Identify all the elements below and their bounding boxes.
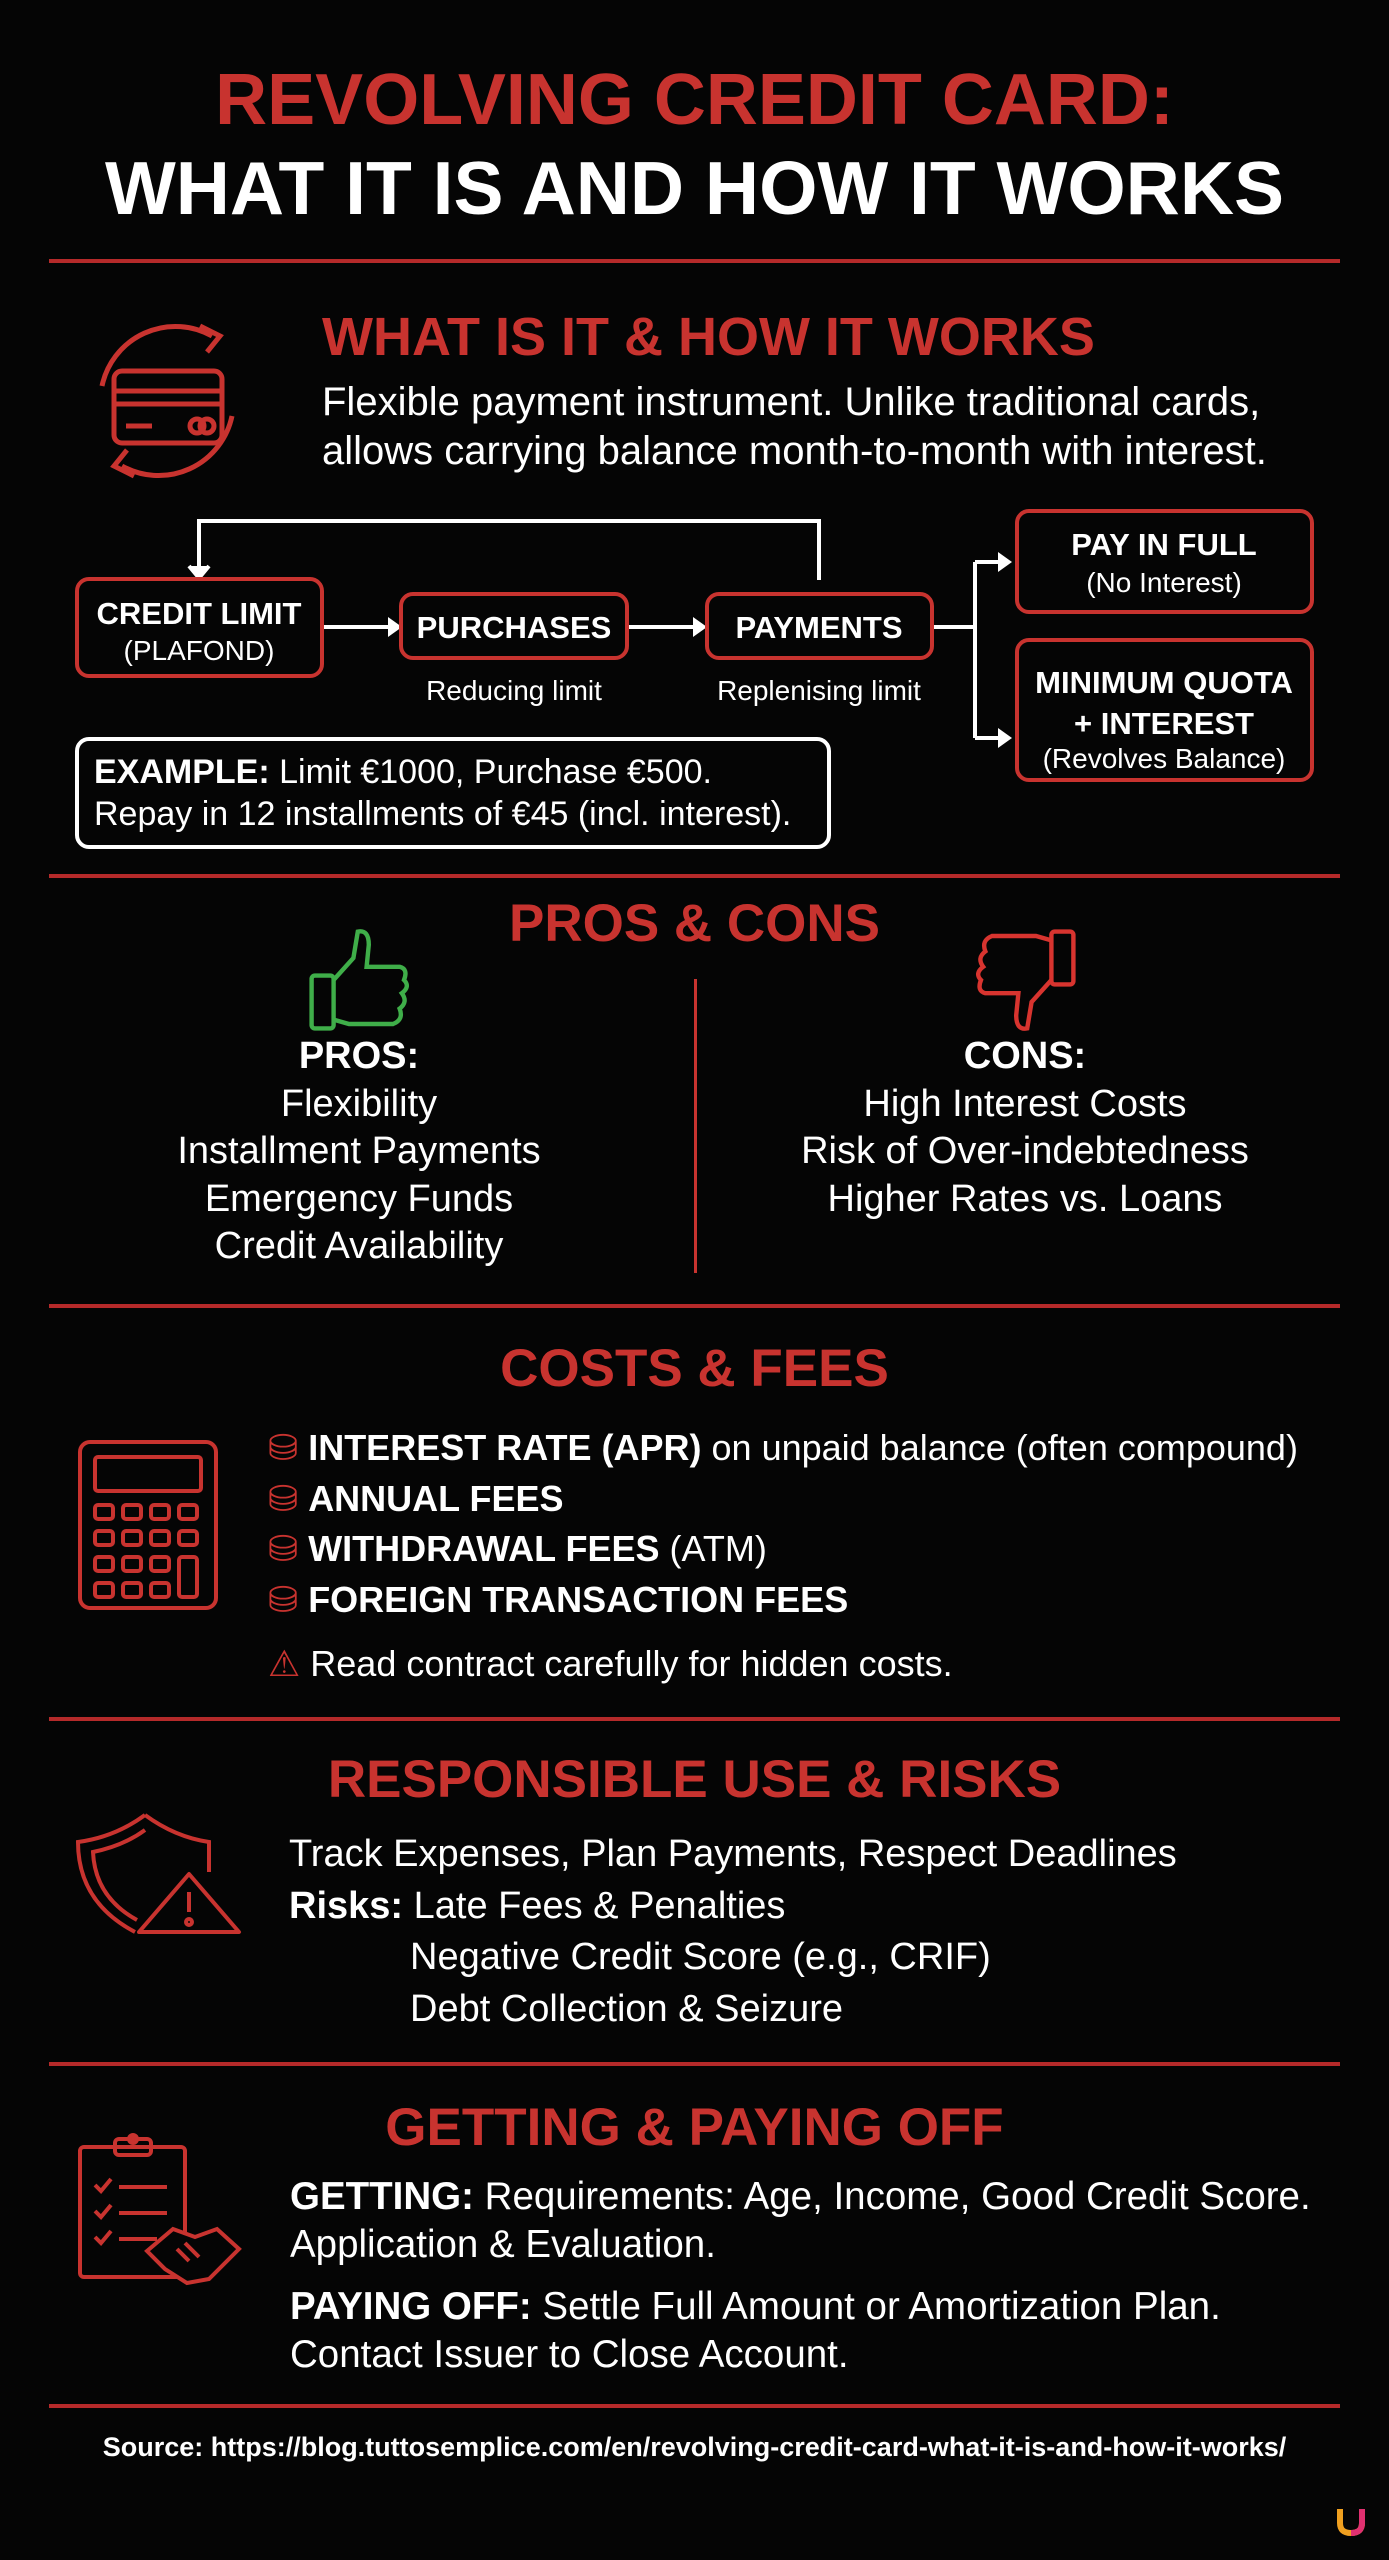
text: responsible use & risks: Negative Credit Score (e.g., CRIF): [410, 1936, 991, 1978]
panel: pros: Emergency Funds: [205, 1178, 513, 1220]
panel: cons: Higher Rates vs. Loans: [828, 1178, 1222, 1220]
list: fees: ⚠ Read contract carefully for hidden costs.: [268, 1643, 953, 1684]
flow diagram: CREDIT LIMIT: [97, 596, 302, 631]
text: getting & paying off: Contact Issuer to Close Account.: [290, 2332, 849, 2376]
list: fees: [268, 1427, 1298, 1684]
flow diagram: + INTEREST: [1074, 706, 1254, 741]
text: getting & paying off: GETTING: Requirements: Age, Income, Good Credit Score.: [290, 2175, 1311, 2218]
panel: cons: Risk of Over-indebtedness: [801, 1130, 1249, 1172]
flow diagram: [75, 509, 1314, 849]
icon: shield warning: [76, 1813, 242, 1934]
flow diagram: (Revolves Balance): [1043, 743, 1285, 774]
panel: pros: Credit Availability: [215, 1225, 503, 1267]
flow diagram: PAYMENTS: [735, 610, 903, 645]
icon: clipboard handshake: [78, 2133, 242, 2286]
list: fees: ⛁ FOREIGN TRANSACTION FEES: [268, 1578, 848, 1620]
title: REVOLVING CREDIT CARD:: [215, 60, 1174, 140]
flow diagram: Reducing limit: [426, 675, 602, 706]
list: fees: ⛁ ANNUAL FEES: [268, 1478, 564, 1518]
text: responsible use & risks: Track Expenses, Plan Payments, Respect Deadlines: [289, 1833, 1177, 1875]
text: getting & paying off: [290, 2175, 1311, 2376]
text: responsible use & risks: Risks: Late Fees & Penalties: [289, 1884, 785, 1926]
title: WHAT IT IS AND HOW IT WORKS: [105, 146, 1284, 230]
flow diagram: PAY IN FULL: [1071, 527, 1257, 562]
text: responsible use & risks: Debt Collection & Seizure: [410, 1988, 843, 2030]
flow diagram: Repay in 12 installments of €45 (incl. interest).: [94, 795, 791, 833]
source: Source: https://blog.tuttosemplice.com/en/revolving-credit-card-what-it-is-and-how-it-works/: [103, 2432, 1286, 2462]
list: fees: ⛁ INTEREST RATE (APR) on unpaid balance (often compound): [268, 1427, 1298, 1468]
panel: pros: Flexibility: [281, 1082, 437, 1124]
text: description: [322, 380, 1267, 473]
text: responsible use & risks: [289, 1833, 1177, 2030]
panel: cons: CONS:: [964, 1035, 1086, 1077]
icon: thumbs down: [976, 929, 1076, 1031]
title: [105, 60, 1284, 230]
logo: [1337, 2509, 1365, 2536]
list: fees: ⛁ WITHDRAWAL FEES (ATM): [268, 1528, 767, 1569]
flow diagram: (No Interest): [1086, 567, 1242, 598]
panel: pros: Installment Payments: [177, 1130, 541, 1172]
flow diagram: EXAMPLE: Limit €1000, Purchase €500.: [94, 753, 712, 791]
icon: card with cycle arrows: [100, 324, 234, 478]
panel: cons: High Interest Costs: [863, 1082, 1187, 1124]
text: description: Flexible payment instrument. Unlike traditional cards,: [322, 380, 1260, 424]
heading: responsible use: RESPONSIBLE USE & RISKS: [328, 1750, 1061, 1809]
icon: calculator: [78, 1440, 218, 1610]
panel: pros: PROS:: [299, 1035, 419, 1077]
text: getting & paying off: Application & Evaluation. PAYING OFF: Settle Full Amount or Amortization Plan.: [290, 2222, 1221, 2328]
heading: getting & paying off: GETTING & PAYING OFF: [385, 2098, 1004, 2157]
panel: pros: [177, 1035, 541, 1267]
panel: cons: [801, 1035, 1249, 1220]
heading: pros & cons: PROS & CONS: [509, 894, 880, 953]
flow diagram: (PLAFOND): [124, 635, 274, 666]
flow diagram: MINIMUM QUOTA: [1035, 665, 1293, 700]
icon: thumbs up: [309, 929, 409, 1031]
text: description: allows carrying balance month-to-month with interest.: [322, 429, 1267, 473]
heading: what is it: WHAT IS IT & HOW IT WORKS: [322, 307, 1095, 367]
heading: costs & fees: COSTS & FEES: [500, 1339, 889, 1398]
flow diagram: PURCHASES: [417, 610, 611, 645]
flow diagram: Replenising limit: [717, 675, 921, 706]
